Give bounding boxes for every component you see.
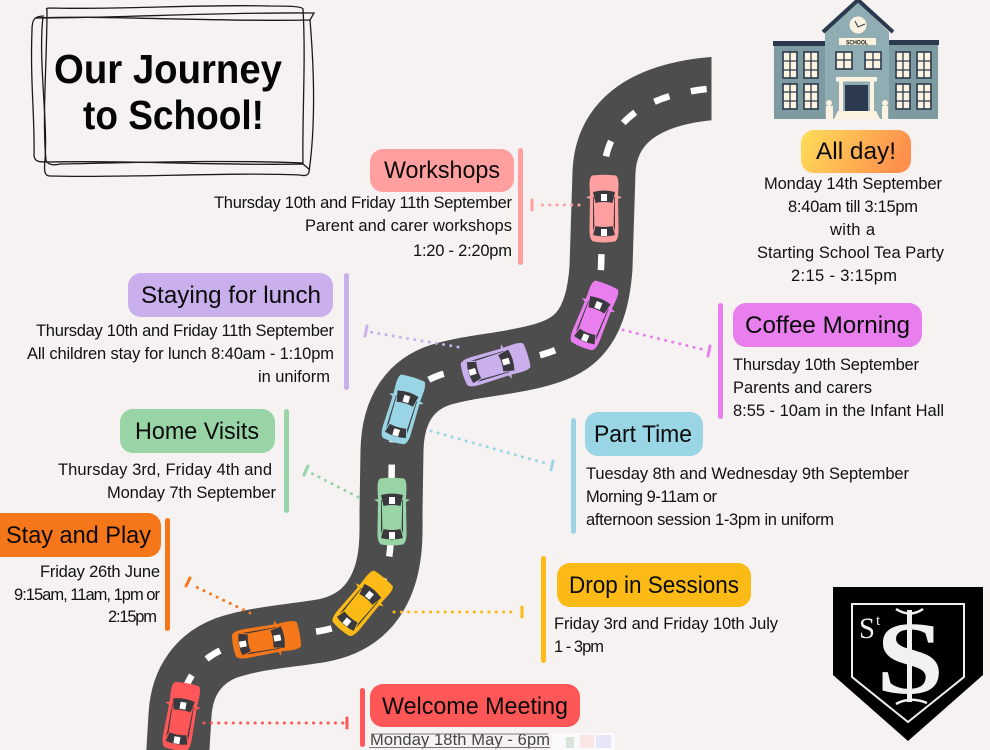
panel: coffee morning: Parents and carers — [733, 379, 872, 397]
panel: stay and play: 9:15am, 11am, 1pm or — [14, 586, 160, 604]
icon: orange car — [230, 616, 303, 664]
panel: stay and play: Friday 26th June — [40, 563, 160, 581]
panel: part time: afternoon session 1-3pm in uniform — [586, 511, 834, 529]
panel: workshops: Workshops — [384, 157, 500, 184]
panel: all day: 8:40am till 3:15pm — [788, 198, 918, 216]
panel: workshops: Parent and carer workshops — [305, 217, 512, 235]
panel: drop in sessions: Drop in Sessions — [569, 572, 739, 599]
icon: green car — [374, 478, 410, 546]
panel: home visits: Home Visits — [135, 418, 259, 445]
panel: coffee morning: Thursday 10th September — [733, 356, 920, 374]
icon: yellow car — [327, 566, 398, 641]
panel: staying for lunch: Staying for lunch — [141, 282, 321, 309]
panel: coffee morning: Coffee Morning — [745, 312, 910, 339]
panel: staying for lunch: in uniform — [258, 368, 330, 386]
panel: stay and play: 2:15pm — [108, 608, 157, 626]
icon: red car — [157, 680, 205, 750]
icon: school crest shield: S — [859, 612, 875, 645]
panel: workshops: Thursday 10th and Friday 11th September — [214, 194, 512, 212]
panel: stay and play — [0, 513, 170, 631]
panel: workshops: 1:20 - 2:20pm — [413, 242, 512, 260]
panel: welcome meeting — [360, 684, 615, 750]
title: to School! — [83, 92, 264, 138]
arrow: drop in connector — [394, 607, 522, 617]
arrow: stay and play connector — [186, 578, 250, 613]
panel: all day — [757, 130, 945, 285]
panel: all day: Starting School Tea Party — [757, 244, 945, 262]
panel: staying for lunch: Thursday 10th and Friday 11th September — [36, 322, 334, 340]
panel: staying for lunch: All children stay for lunch 8:40am - 1:10pm — [27, 345, 334, 363]
icon: lilac car — [458, 338, 533, 392]
panel: drop in sessions — [541, 556, 779, 663]
arrow: workshops connector — [532, 200, 579, 210]
arrow: home visits connector — [304, 466, 358, 497]
panel: welcome meeting: Welcome Meeting — [382, 693, 568, 720]
panel: part time: Part Time — [594, 421, 692, 448]
panel: welcome meeting: Monday 18th May - 6pm — [370, 731, 550, 749]
title — [54, 46, 282, 138]
arrow: coffee connector — [623, 330, 710, 356]
arrow: welcome connector — [204, 718, 347, 728]
panel: stay and play: Stay and Play — [6, 522, 151, 549]
title frame scribble — [32, 6, 314, 176]
panel: home visits: Thursday 3rd, Friday 4th and — [58, 461, 272, 479]
title: Our Journey — [54, 46, 282, 92]
icon: salmon car — [586, 175, 622, 242]
panel: staying for lunch — [27, 273, 349, 390]
panel: workshops — [214, 148, 523, 265]
panel: all day: All day! — [816, 138, 896, 165]
icon: pink car — [565, 278, 624, 354]
arrow: lunch connector — [365, 326, 458, 347]
panel: home visits: Monday 7th September — [107, 484, 276, 502]
icon: school building: SCHOOL — [846, 40, 868, 46]
panel: home visits — [58, 409, 289, 513]
icon: school crest shield — [833, 587, 983, 741]
panel: part time: Tuesday 8th and Wednesday 9th September — [586, 465, 910, 483]
panel: drop in sessions: Friday 3rd and Friday 10th July — [554, 615, 779, 633]
panel: coffee morning: 8:55 - 10am in the Infant Hall — [733, 402, 944, 420]
panel: all day: Monday 14th September — [764, 175, 942, 193]
icon: school crest shield: S — [876, 601, 944, 716]
icon: blue car — [376, 372, 430, 447]
icon: school crest shield: t — [876, 613, 881, 629]
panel: drop in sessions: 1 - 3pm — [554, 638, 604, 656]
arrow: part time connector — [431, 431, 553, 470]
road — [177, 87, 735, 750]
panel: all day: 2:15 - 3:15pm — [791, 267, 897, 285]
panel: part time: Morning 9-11am or — [586, 488, 718, 506]
panel: all day: with a — [829, 221, 876, 239]
icon: school building — [773, 0, 939, 119]
panel: coffee morning — [718, 303, 944, 420]
panel: part time — [571, 412, 910, 534]
